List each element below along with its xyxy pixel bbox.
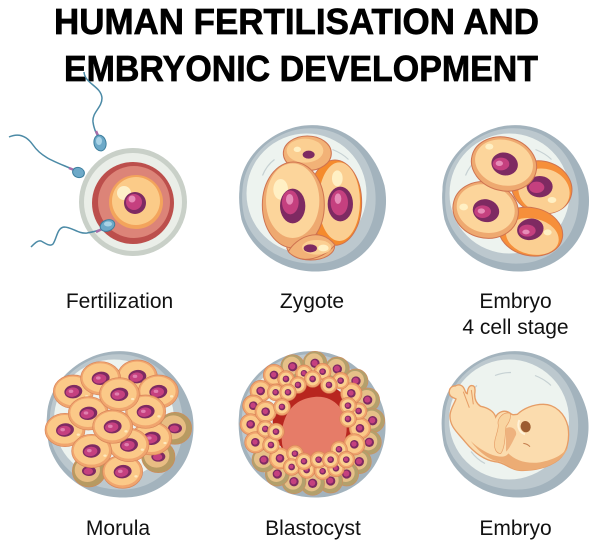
- panel: embryo 4 cell stage: [442, 125, 589, 339]
- panel: fertilization: [9, 72, 187, 313]
- icon: sperm left: [9, 135, 86, 179]
- illustration: blastocyst cavity and cells: [240, 351, 385, 495]
- panel: morula: [45, 351, 194, 540]
- label: Blastocyst: Blastocyst: [265, 517, 361, 540]
- label: Morula: Morula: [86, 517, 150, 540]
- illustration: morula shell: [47, 351, 194, 498]
- icon: sperm top: [84, 72, 108, 152]
- illustration: zygote shell: [239, 125, 386, 272]
- title: EMBRYONIC DEVELOPMENT: [64, 48, 538, 89]
- illustration: fetus: [449, 385, 569, 470]
- label: Zygote: Zygote: [280, 290, 344, 313]
- illustration: four cells: [447, 130, 579, 262]
- illustration: blastocyst shell: [239, 351, 386, 498]
- illustration: egg cell: [79, 148, 187, 256]
- icon: sperm bottom: [31, 218, 117, 247]
- panel: blastocyst: [239, 351, 386, 540]
- label: Embryo 4 cell stage: 4 cell stage: [462, 316, 569, 339]
- illustration: zygote cells: [262, 136, 362, 260]
- illustration: embryo shell: [442, 351, 589, 498]
- label: Embryo: Embryo: [479, 517, 552, 540]
- illustration: morula cells: [45, 360, 192, 488]
- label: Fertilization: Fertilization: [66, 290, 173, 313]
- panel: embryo: [442, 351, 589, 540]
- panel: zygote: [239, 125, 386, 313]
- title: [54, 1, 539, 89]
- illustration: embryo shell: [442, 125, 589, 272]
- label: Embryo 4 cell stage: [462, 290, 569, 339]
- title: HUMAN FERTILISATION AND: [54, 1, 539, 42]
- label: Embryo 4 cell stage: Embryo: [479, 290, 552, 313]
